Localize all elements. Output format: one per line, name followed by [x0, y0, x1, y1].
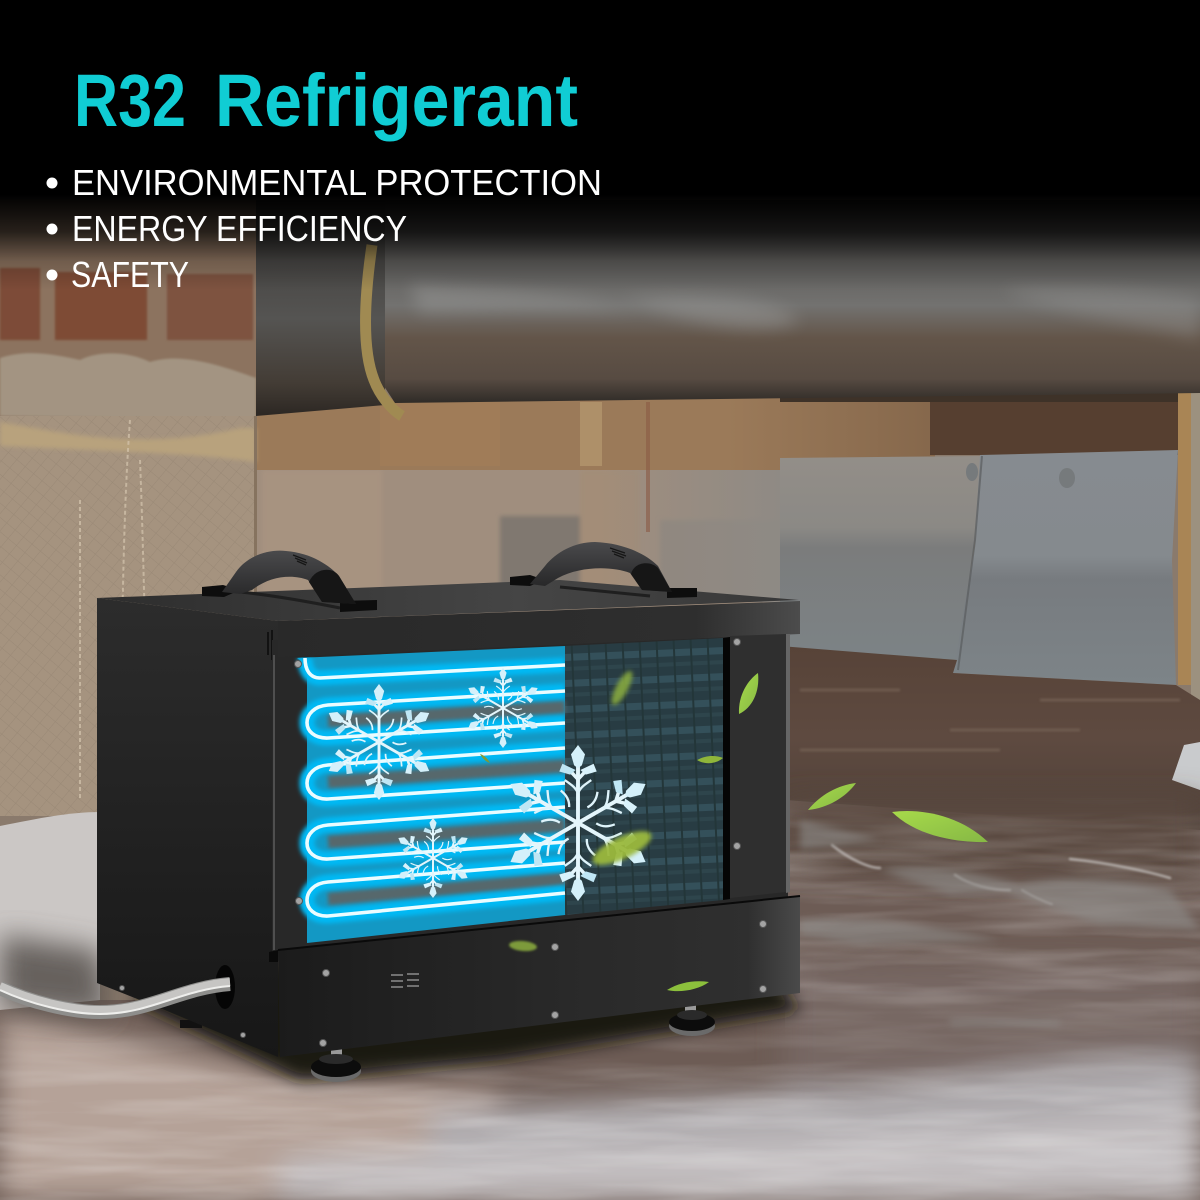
wood post and foil [1178, 390, 1191, 685]
drain hole [215, 965, 235, 1009]
grip holes [293, 555, 307, 565]
handle: left [202, 551, 377, 612]
right edge of the unit [786, 634, 790, 893]
mount shadow [240, 592, 340, 608]
bullet: environmental protection: ENVIRONMENTAL PROTECTION [72, 162, 602, 203]
screws [120, 638, 766, 1046]
snowflake: upper right [463, 668, 543, 748]
back wall: upper cardboard band [255, 398, 935, 470]
coil window [297, 638, 723, 943]
duct left section [256, 200, 385, 416]
handle: right [510, 542, 697, 598]
leaf [588, 825, 656, 871]
title: Refrigerant [215, 59, 578, 142]
duct [380, 200, 1200, 403]
leaf [509, 940, 537, 952]
bullet: safety: SAFETY [71, 254, 189, 295]
leaf [697, 756, 723, 763]
refrigerant coil glow [305, 658, 565, 916]
vent slots [391, 974, 419, 987]
leaf [739, 673, 758, 714]
flying leaves [480, 668, 988, 991]
drain hose [0, 982, 230, 1014]
snowflake: upper left [322, 684, 436, 800]
leaf [892, 811, 988, 842]
leaf [608, 668, 636, 708]
left brick wall [0, 200, 256, 420]
grey vapour barrier on wall [780, 450, 1178, 685]
frosted blue side [297, 646, 565, 943]
duct strap [366, 245, 402, 416]
grip holes [610, 548, 626, 558]
brown mid floor [780, 646, 1200, 830]
plastic foreground: white left sheet [0, 812, 100, 1040]
bottom front box [278, 896, 800, 1057]
left mesh wall [0, 416, 256, 816]
machine shadow on floor [0, 935, 110, 1018]
top front band [278, 601, 800, 657]
left side panel [97, 598, 278, 1057]
leaf [667, 981, 709, 991]
title: R32 [74, 59, 186, 142]
snowflake: large centre [501, 745, 655, 901]
front body plate [272, 620, 788, 962]
dehumidifier unit [0, 542, 800, 1082]
snowflake: lower [393, 818, 473, 898]
plastic foreground: main [0, 800, 1200, 1200]
adjustable feet [180, 1000, 715, 1082]
side seam [268, 630, 272, 660]
right side strip [730, 634, 786, 898]
leaf [480, 754, 490, 763]
top black fade [0, 0, 1200, 290]
feature list [46, 162, 602, 295]
top face [97, 580, 799, 621]
bullet: energy efficiency: ENERGY EFFICIENCY [72, 208, 407, 249]
back wall: lower grey section [255, 400, 815, 660]
refrigerant coil tube [305, 658, 565, 916]
leaf [808, 783, 856, 810]
title [74, 59, 578, 142]
plastic wrinkle texture [0, 1036, 1200, 1200]
